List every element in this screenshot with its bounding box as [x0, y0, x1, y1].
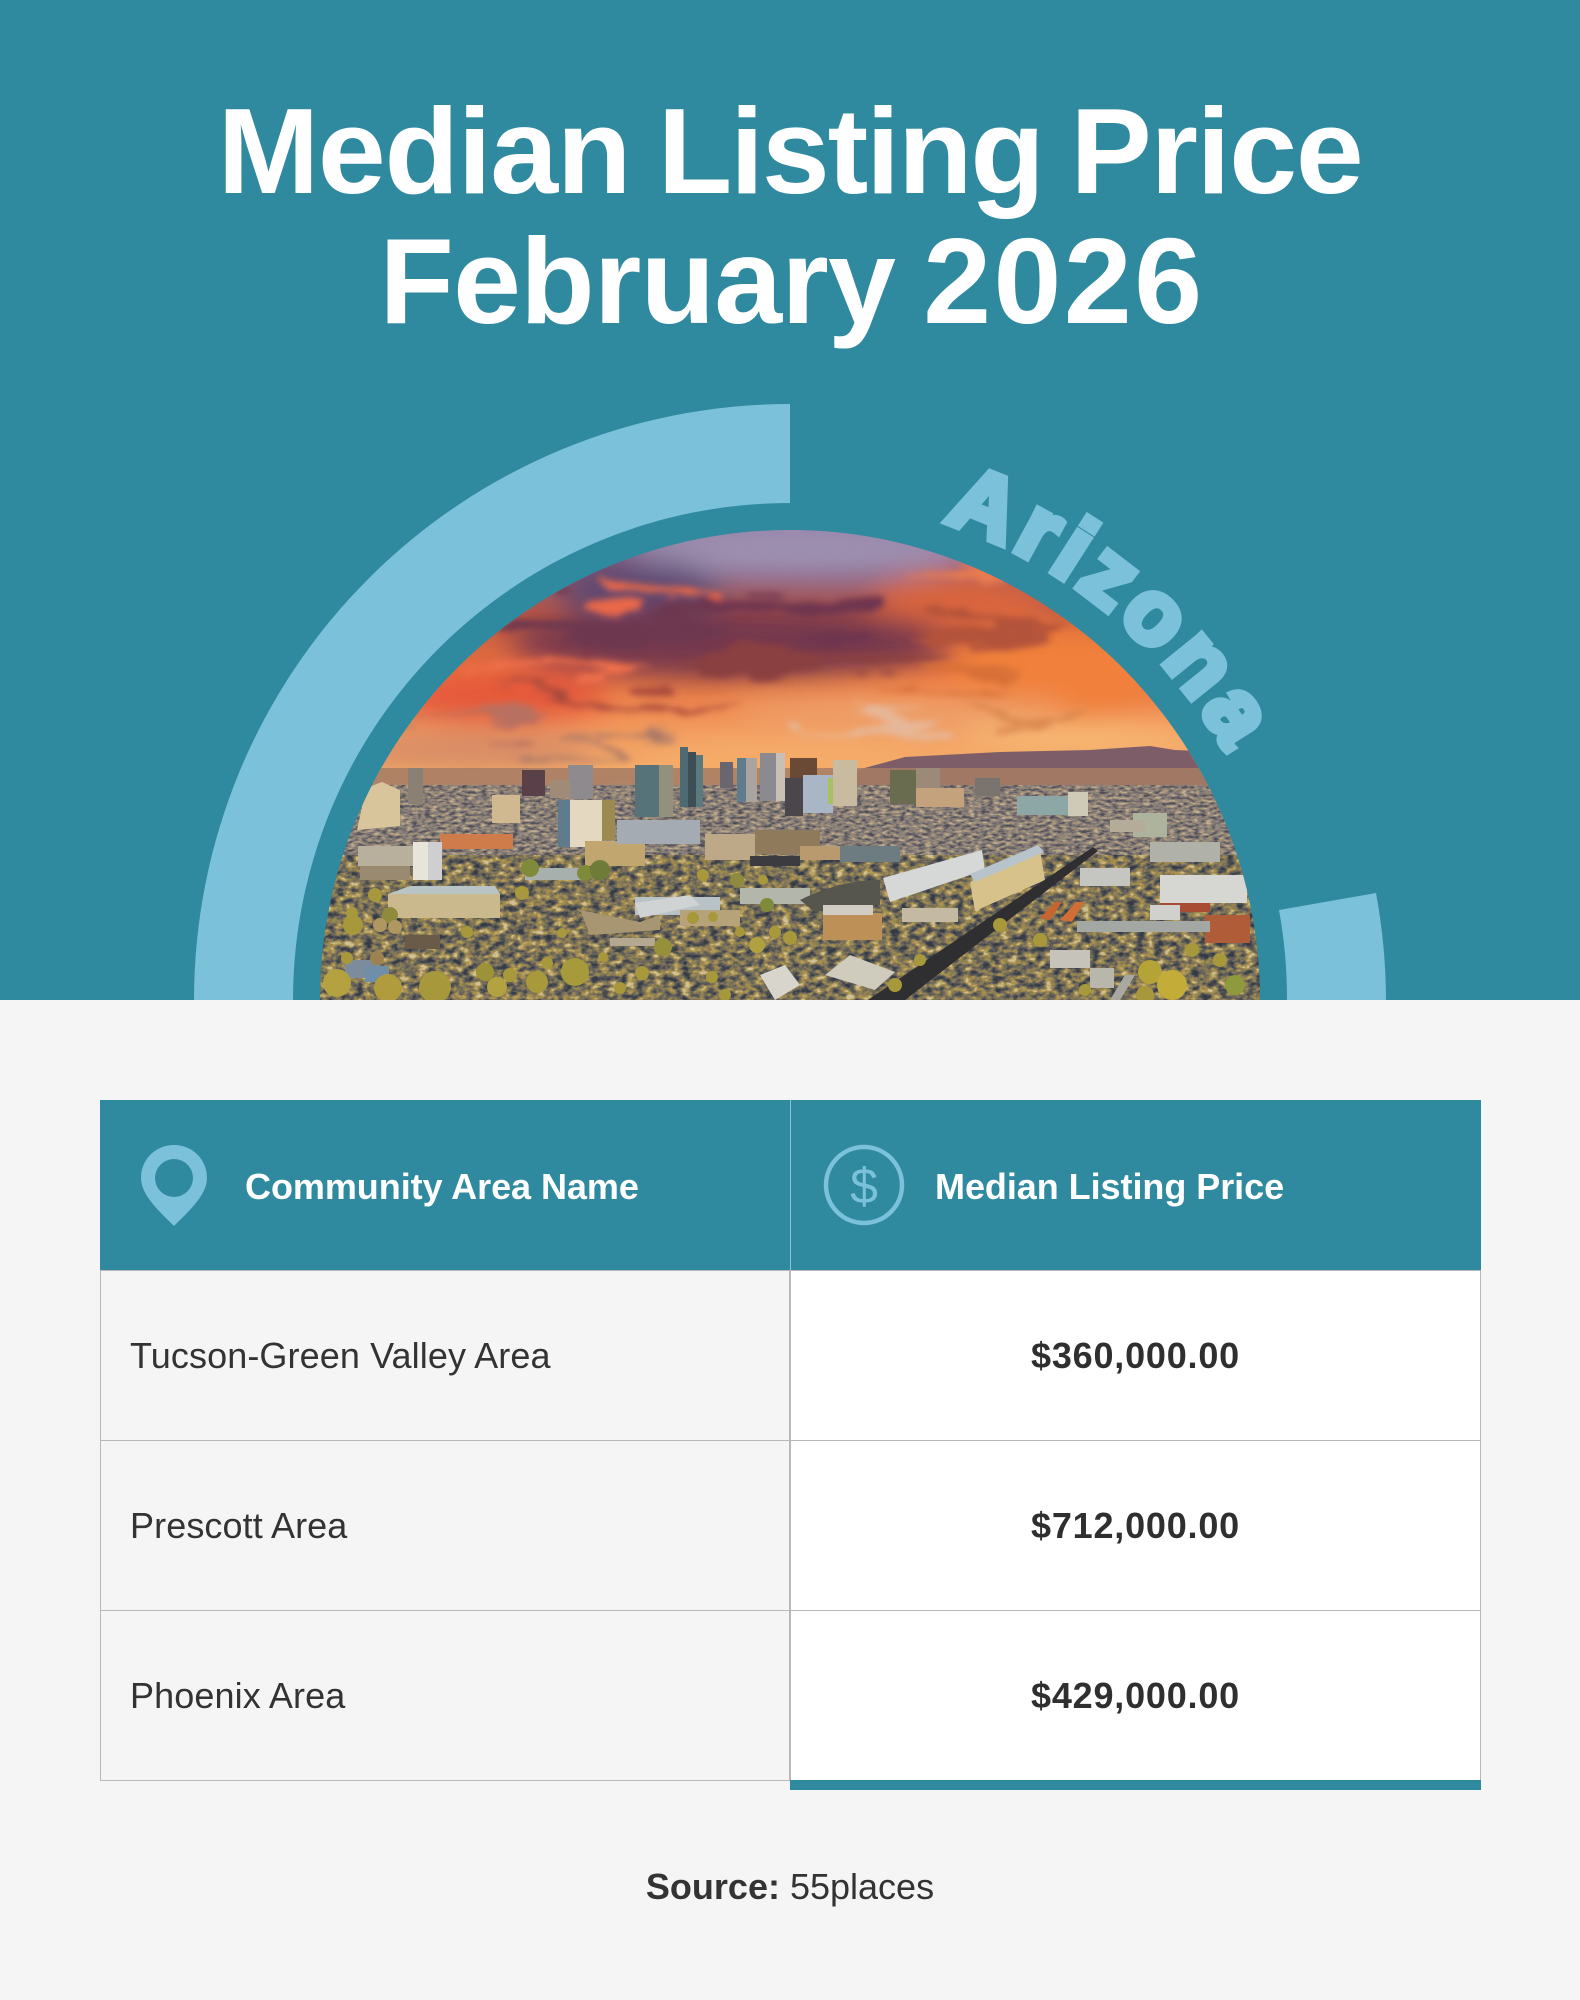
photo horizon haze [372, 768, 1208, 785]
hero panel [0, 0, 1580, 1000]
photo mountains [850, 746, 1240, 800]
row 3 name: Phoenix Area [130, 1675, 345, 1716]
row 2 name [100, 1440, 790, 1611]
table header: community area name [100, 1100, 790, 1270]
row 1 name [100, 1270, 790, 1441]
row 3 name [100, 1610, 790, 1781]
row 1 name: Tucson-Green Valley Area [130, 1335, 551, 1376]
hero graphic: ring, photo and curved label [194, 404, 1386, 1000]
photo mid-rise blocks [345, 800, 1250, 1000]
row 3 price: $429,000.00 [1031, 1675, 1240, 1716]
icon: location pin [141, 1145, 207, 1226]
ring arc: small right stub [1279, 893, 1386, 1000]
photo downtown buildings [357, 747, 1167, 837]
table [100, 1100, 1481, 1790]
photo sky [370, 530, 1210, 790]
photo city ground [320, 785, 1260, 1000]
photo trees [323, 859, 1245, 1004]
row 2 price: $712,000.00 [1031, 1505, 1240, 1546]
header label: Community Area Name [245, 1166, 639, 1207]
title line 2: February 2026 [379, 213, 1205, 349]
curved label: Arizona: Arizona [940, 468, 1262, 756]
icon: dollar coin: $ [850, 1158, 878, 1214]
header label: Median Listing Price [935, 1166, 1284, 1207]
row 1 price [790, 1270, 1481, 1441]
photo road [868, 847, 1098, 1000]
row 2 price [790, 1440, 1481, 1611]
source note: Source: 55places [646, 1866, 934, 1907]
row 1 price: $360,000.00 [1031, 1335, 1240, 1376]
row 2 name: Prescott Area [130, 1505, 347, 1546]
row 3 price [790, 1610, 1481, 1781]
icon: dollar coin [824, 1144, 904, 1226]
title line 1: Median Listing Price [218, 83, 1362, 219]
table header: median listing price [790, 1100, 1481, 1270]
photo: Phoenix skyline at sunset [320, 522, 1260, 1004]
ring arc: large left quarter [194, 404, 790, 1000]
price column accent bar [790, 1780, 1481, 1790]
